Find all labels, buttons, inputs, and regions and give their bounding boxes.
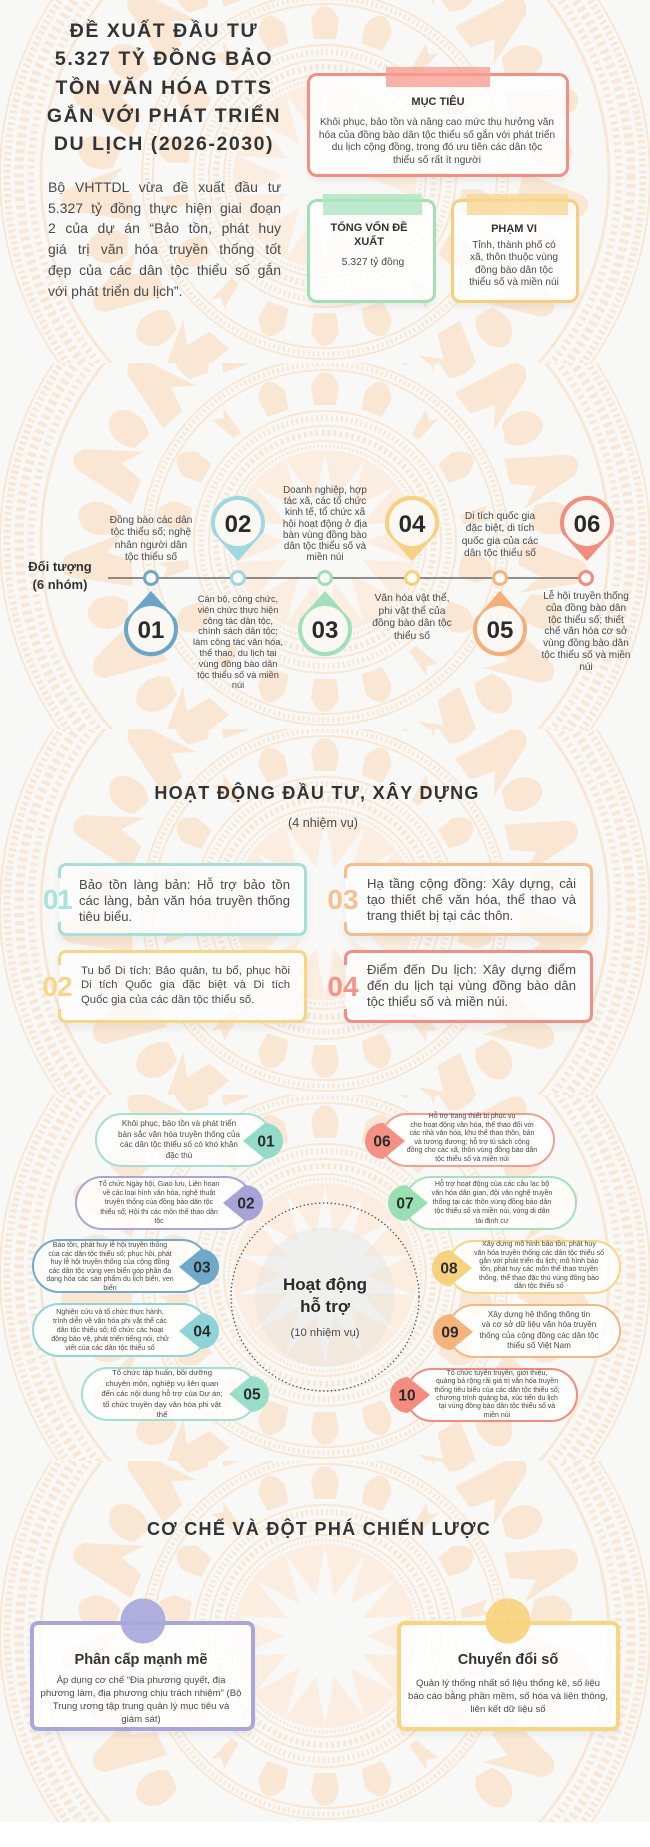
item 06: cho hoạt động văn hóa, thể thao đối với [410,1122,534,1129]
item 06: các nhà văn hóa, khu thể thao thôn, bản [410,1130,534,1137]
text: nhóm 06 [542,590,630,673]
item 03 [32,1239,219,1293]
item 10: chương trình quảng bá, xúc tiến du lịch [436,1395,558,1402]
text: nhóm 05: dân tộc thiểu số [464,548,536,559]
panel: phân cấp mạnh mẽ: phương làm, địa phương chịu trách nhiệm” (Bộ [41,1688,241,1699]
item 07: thống tại các thôn vùng đồng bào dân [433,1198,551,1206]
item 03: của các dân tộc thiểu số; phục hồi, phát [48,1250,172,1258]
item 04: trình diễn về văn hóa phi vật thể các [53,1317,167,1325]
item 04: 04 [193,1324,211,1340]
task card 03: 03 [327,884,359,915]
item 02: thiểu số; Hội thi các môn thể thao dân [100,1209,218,1216]
panel: tổng vốn đề xuất [307,194,436,306]
text: nhóm 02: vùng đồng bào dân [199,659,277,669]
text: nhóm 02 [193,594,283,690]
text: nhóm 02: làm công tác văn hóa, [193,637,283,647]
title: DU LỊCH (2026-2030) [54,133,274,155]
item 06: Hỗ trợ trang thiết bị phục vụ [429,1113,515,1120]
panel: chuyển đổi số: Quản lý thống nhất số liệu thống kê, số liệu [416,1678,600,1689]
item 07 [388,1176,577,1230]
panel: phân cấp mạnh mẽ [30,1598,255,1734]
item 07: văn hóa dân gian, đội văn nghệ truyền [432,1189,552,1197]
item 08: gắn với phát triển du lịch; mô hình bảo [479,1258,599,1265]
title: TỒN VĂN HÓA DTTS [56,77,272,99]
intro paragraph: 2 của dự án “Bảo tồn, phát huy [48,220,281,236]
timeline axis and pins: 06 [574,511,600,538]
item 03: 03 [193,1260,211,1276]
title [47,20,281,155]
heading: hoạt động đầu tư, xây dựng: HOẠT ĐỘNG ĐẦU TƯ, XÂY DỰNG [154,783,480,803]
text: nhóm 03: kinh tế, tổ chức xã [285,507,365,518]
panel: phân cấp mạnh mẽ: giám sát) [121,1714,161,1725]
panel: phạm vi: xã, thôn thuộc vùng [470,252,558,263]
item 08: dân tộc thiểu số [514,1283,564,1290]
center circle: hoạt động hỗ trợ [230,1202,420,1392]
item 08 [432,1240,621,1294]
panel: mục tiêu: du lịch cộng đồng, trong đó ưu tiên các dân tộc [332,142,542,153]
item 09 [433,1304,621,1358]
panel: chuyển đổi số [397,1598,620,1734]
panel: phân cấp mạnh mẽ: Phân cấp mạnh mẽ [74,1652,208,1668]
item 10: miền núi [484,1412,510,1419]
item 02: 02 [237,1196,255,1212]
task card 04: 04 [327,971,359,1002]
text: nhóm 02: viên chức thực hiện [198,605,278,615]
text: nhóm 01: nhân người dân [115,540,187,551]
panel: phân cấp mạnh mẽ: Trung ương tập trung quản lý mục tiêu và [53,1701,229,1712]
timeline axis and pins: 02 [225,511,251,538]
item 01: đặc thù [166,1151,192,1160]
panel: tổng vốn đề xuất: 5.327 tỷ đồng [342,257,404,268]
item 09: Xây dựng hệ thống thông tin [488,1310,590,1319]
text: nhóm 03: miền núi [306,552,344,563]
task card 02 [42,950,307,1026]
timeline axis and pins [108,496,614,656]
text: nhóm 02: Cán bộ, công chức, [198,594,278,604]
text: nhóm 06: chế văn hóa cơ sở [544,626,628,637]
item 02: Tổ chức Ngày hội, Giao lưu, Liên hoan [99,1181,219,1188]
item 09: và cơ sở dữ liệu văn hóa truyền [482,1320,596,1329]
item 09: 09 [441,1324,459,1342]
task card 03: Hạ tầng cộng đồng: Xây dựng, cải [367,876,576,891]
item 04: Nghiên cứu và tổ chức thực hành, [56,1308,164,1316]
title: 5.327 TỶ ĐỒNG BẢO [55,48,273,70]
item 06 [365,1112,555,1167]
subheading: 4 nhiệm vụ: (4 nhiệm vụ) [288,816,358,830]
item 04: viết của các dân tộc thiểu số [65,1344,155,1352]
item 04: dân tộc thiểu số; tổ chức các hoạt [57,1326,163,1334]
panel: chuyển đổi số: báo cáo bằng phần mềm, số hóa và liên thông, [408,1691,608,1702]
icon: yellow circle [486,1598,530,1644]
task card 02: Quốc gia của các dân tộc thiểu số. [81,994,254,1006]
panel: phạm vi: PHẠM VI [491,223,537,235]
text: nhóm 05: Di tích quốc gia [465,511,535,522]
item 05: 05 [243,1386,261,1404]
task card 01: các làng, bản văn hóa truyền thống [79,893,290,908]
item 03: các dân tộc vùng ven biển góp phần đa [49,1268,171,1274]
item 08: tồn, phát huy các môn thể thao truyền [480,1266,598,1273]
text: nhóm 02: chính sách dân tộc; [198,626,278,636]
item 04: động bảo vệ, phát triển tiếng nói, chữ [51,1335,169,1343]
title: GẮN VỚI PHÁT TRIỂN [47,105,281,127]
task card 01 [43,863,307,940]
task card 04: đến du lịch tại vùng đồng bào dân [367,978,576,993]
timeline label: Đối tượng [28,559,92,574]
intro paragraph: Bộ VHTTDL vừa đề xuất đầu tư [48,179,281,195]
item 03: Bảo tồn, phát huy lễ hội truyền thống [53,1242,167,1249]
panel: phạm vi: Tỉnh, thành phố có [472,240,556,251]
text: nhóm 01 [110,515,192,563]
item 01: các dân tộc thiểu số có khó khăn [120,1140,238,1149]
text: nhóm 05: quốc gia của các [462,536,538,547]
panel: mục tiêu: Khôi phục, bảo tồn và nâng cao mức thụ hưởng văn [320,117,554,128]
intro paragraph: đẹp của các dân tộc thiểu số gắn [48,262,281,278]
item 01 [95,1113,283,1167]
text: nhóm 01: tộc thiểu số [125,552,177,563]
item 02: truyền thống của đồng bào dân tộc [105,1199,213,1206]
item 05: tổ chức truyền dạy văn hóa phi vật [103,1400,221,1408]
item 02 [75,1176,263,1230]
center circle: hoạt động hỗ trợ: hỗ trợ [300,1297,350,1316]
task card 03: tạo thiết chế văn hóa, thể thao và [367,892,576,907]
text: nhóm 06: vùng đồng bào dân [543,638,629,649]
item 01: bản sắc văn hóa truyền thống của [118,1130,240,1139]
text: nhóm 06: Lễ hội truyền thống [543,591,629,602]
task card 03 [327,863,593,940]
item 08: thống, thể thao đặc thù vùng đồng bào [479,1275,599,1282]
text: nhóm 06: tộc thiểu số; thiết [548,615,624,626]
item 07: tái định cư [475,1216,509,1224]
text: nhóm 01: Đồng bào các dân [110,515,192,526]
item 02: tộc [154,1218,164,1225]
icon: purple circle [120,1598,166,1644]
panel: phạm vi [451,194,579,306]
text: nhóm 03: Doanh nghiệp, hợp [283,485,367,496]
item 07: tộc thiểu số và miền núi, vùng di dân [434,1207,550,1215]
panel: phạm vi: thiểu số và miền núi [469,277,559,288]
text: nhóm 04: thiểu số [394,631,430,642]
heading: cơ chế và đột phá chiến lược: CƠ CHẾ VÀ ĐỘT PHÁ CHIẾN LƯỢC [147,1519,491,1539]
panel: mục tiêu [307,67,569,180]
task card 04 [327,950,593,1026]
text: nhóm 03: hội hoạt động ở địa [283,519,367,530]
intro paragraph: giá trị văn hóa truyền thống tốt [48,241,281,257]
text: nhóm 04: Văn hóa vật thể, [374,593,450,604]
text: nhóm 05: đặc biệt, di tích [466,523,534,534]
timeline axis and pins: 04 [399,511,426,538]
timeline label [28,559,92,592]
panel: mục tiêu: MỤC TIÊU [411,96,465,108]
task card 01: Bảo tồn làng bản: Hỗ trợ bảo tồn [79,877,290,892]
text: nhóm 03: bàn vùng đồng bào [283,530,367,541]
panel: phân cấp mạnh mẽ: Áp dụng cơ chế “Địa phương quyết, địa [57,1675,225,1686]
item 03: dạng hóa các sản phẩm du lịch biển, ven [46,1276,174,1283]
item 01: 01 [257,1134,275,1150]
item 04 [32,1303,219,1357]
text: nhóm 02: thể thao, du lịch tại [199,648,277,658]
item 09: thống của cộng đồng các dân tộc [479,1331,599,1340]
timeline: đối tượng [28,485,630,690]
item 07: Hỗ trợ hoạt động của các câu lạc bộ [435,1180,549,1188]
item 10: tại vùng đồng bào dân tộc thiểu số và [439,1403,555,1410]
panel: mục tiêu: thiểu số rất ít người [393,154,481,166]
task card 02: Di tích Quốc gia đặc biệt và Di tích [81,979,290,991]
text: nhóm 03: dân tộc thiểu số và [284,541,366,552]
item 02: về các loại hình văn hóa, nghệ thuật [103,1190,215,1197]
item 06: 06 [373,1134,391,1150]
item 10: 10 [398,1388,416,1404]
item 01: Khôi phục, bảo tồn và phát triển [122,1119,236,1128]
item 06: tộc thiểu số và miền núi [435,1156,509,1163]
item 08: Xây dựng mô hình bảo tồn, phát huy [482,1241,596,1248]
intro paragraph: với phát triển du lịch”. [48,283,182,299]
item 05: chuyên môn, nghiệp vụ liên quan [106,1378,218,1388]
timeline axis and pins: 03 [312,617,338,644]
item 03: biển [103,1284,117,1292]
task card 04: Điểm đến Du lịch: Xây dựng điểm [367,962,576,977]
text: nhóm 04 [372,592,452,642]
task card 01: 01 [43,884,71,915]
text: nhóm 06: núi [579,662,593,673]
item 10: quảng bá rộng rãi giá trị văn hóa truyền [436,1378,558,1385]
timeline label: (6 nhóm) [33,577,87,592]
title: ĐỀ XUẤT ĐẦU TƯ [70,20,258,42]
text: nhóm 06: tộc thiểu số và miền [542,650,630,661]
panel: tổng vốn đề xuất: TỔNG VỐN ĐỀ [330,222,408,234]
item 09: thiểu số Việt Nam [507,1341,571,1350]
task card 01: tiêu biểu. [79,909,132,924]
item 07: 07 [396,1196,414,1212]
item 05: thể [157,1410,167,1419]
item 10: Tổ chức tuyên truyền, giới thiệu, [447,1370,547,1377]
item 05: Tổ chức tập huấn, bồi dưỡng [112,1368,212,1377]
text: nhóm 02: công tác dân tộc, [203,616,273,626]
item 05: đến các nội dung hỗ trợ của Dự án; [101,1389,223,1398]
text: nhóm 05 [462,511,538,559]
timeline axis and pins: 01 [138,617,164,644]
text: nhóm 03 [283,485,368,563]
task card 03: trang thiết bị tại các thôn. [367,908,513,923]
item 10: thống tiêu biểu của các dân tộc thiểu số; [434,1387,560,1394]
panel: chuyển đổi số: liên kết dữ liệu số [470,1704,546,1715]
item 03: huy lễ hội truyền thống của cộng đồng [51,1259,169,1266]
panel: mục tiêu: hóa của đồng bào dân tộc thiểu số gắn với phát triển [319,130,555,140]
text: nhóm 02: núi [232,680,244,690]
text: nhóm 04: đồng bào dân tộc [372,618,452,629]
item 05 [81,1367,269,1421]
item 10 [390,1368,578,1422]
intro paragraph: 5.327 tỷ đồng thực hiện giai đoạn [48,200,281,216]
panel: tổng vốn đề xuất: XUẤT [354,236,384,248]
intro paragraph [48,179,281,299]
text: nhóm 03: tác xã, các tổ chức [284,496,366,507]
text: nhóm 02: tộc thiểu số và miền [197,670,279,680]
item 06: và tương đương; hỗ trợ tủ sách cộng [414,1139,530,1146]
center circle: hoạt động hỗ trợ: Hoạt động [283,1275,367,1294]
timeline axis and pins: 05 [487,617,513,644]
item 06: đồng cho các xã, thôn vùng đồng bào dân [407,1147,537,1154]
task card 02: 02 [42,971,72,1002]
panel: phạm vi: đồng bào dân tộc [475,265,553,276]
text: nhóm 01: tộc thiểu số; nghệ [111,527,191,538]
text: nhóm 04: phi vật thể của [378,606,445,617]
center circle: hoạt động hỗ trợ: (10 nhiệm vụ) [290,1327,360,1339]
panel: chuyển đổi số: Chuyển đổi số [458,1652,558,1668]
item 08: văn hóa truyền thống các dân tộc thiểu số [474,1250,604,1256]
task card 04: tộc thiểu số và miền núi. [367,994,508,1009]
text: nhóm 06: của đồng bào dân [546,603,626,614]
item 08: 08 [440,1260,458,1278]
task card 02: Tu bổ Di tích: Bảo quản, tu bổ, phục hồi [81,965,290,977]
